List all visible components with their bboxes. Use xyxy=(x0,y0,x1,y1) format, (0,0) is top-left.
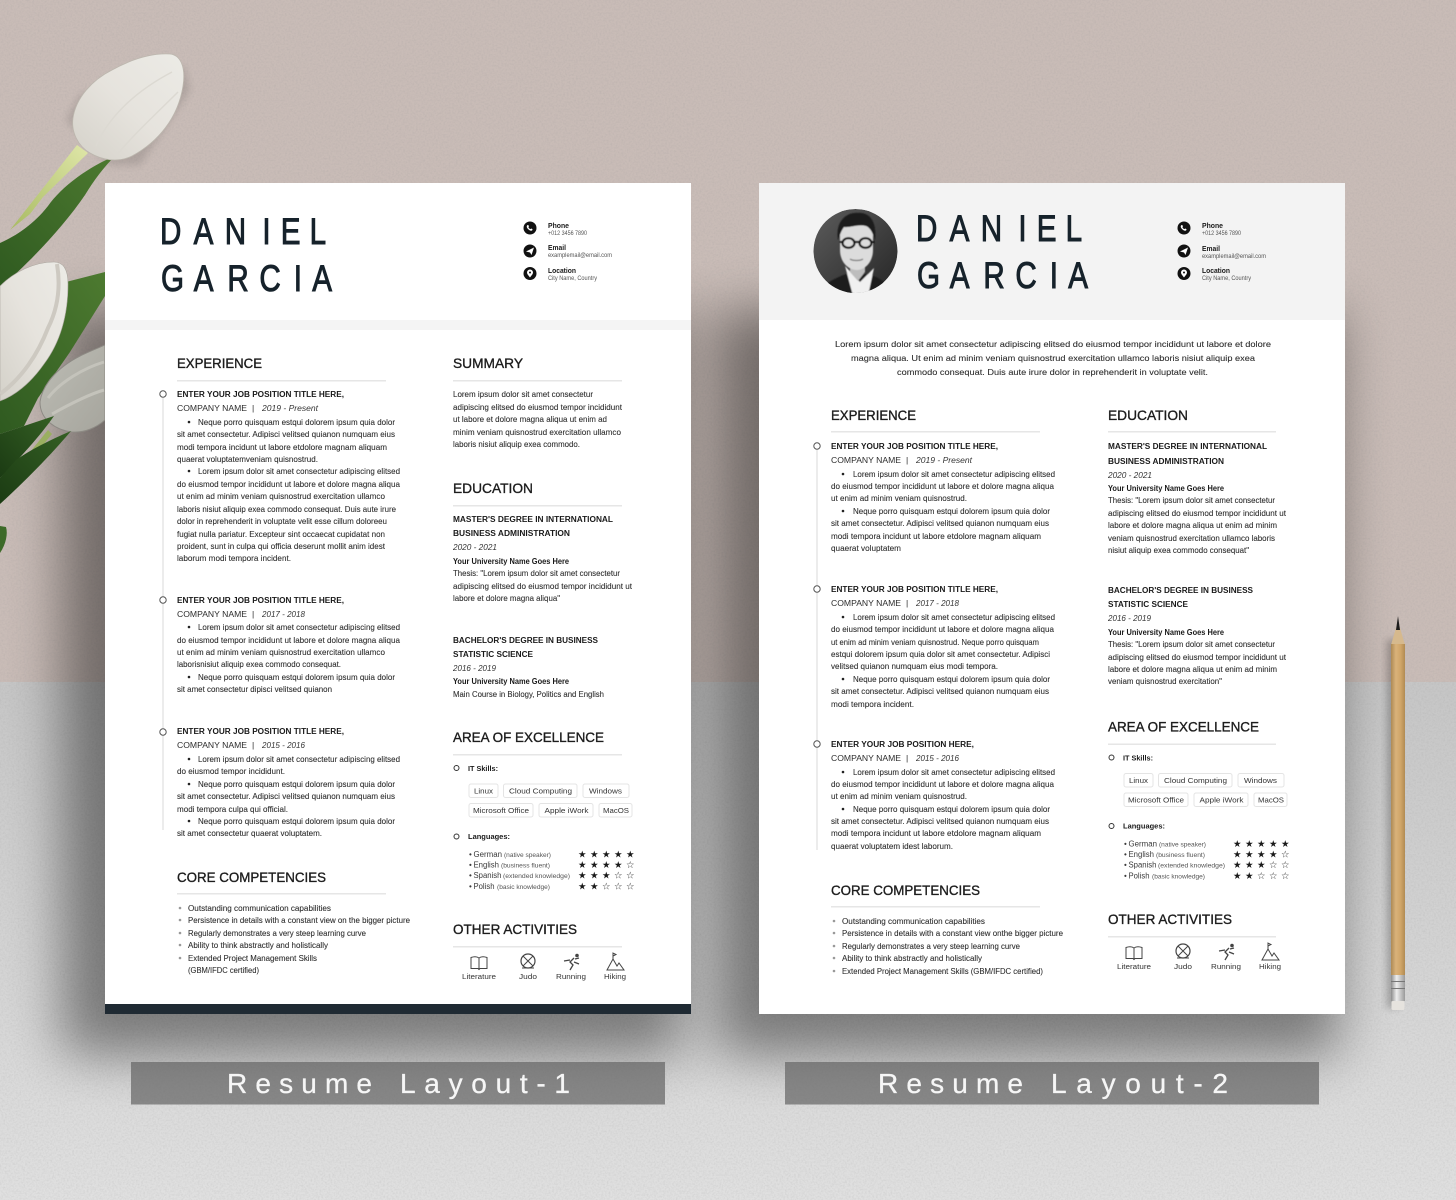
contact block: Location xyxy=(548,266,576,275)
experience section: Neque porro quisquam estqui dolorem ipsum quia dolor xyxy=(853,805,1050,814)
education: BUSINESS ADMINISTRATION xyxy=(453,529,570,538)
area of excellence xyxy=(1108,718,1290,882)
area of excellence: • xyxy=(469,871,472,880)
experience section: Neque porro quisquam estqui dolorem ipsum quia dolor xyxy=(198,673,395,682)
core competencies: Ability to think abstractly and holistically xyxy=(842,954,983,963)
education: 2016 - 2019 xyxy=(452,663,496,673)
contact block: +012 3456 7890 xyxy=(1202,230,1241,237)
other activities xyxy=(1108,911,1281,971)
core competencies xyxy=(177,869,410,975)
area of excellence: German xyxy=(1128,840,1157,848)
area of excellence: Spanish xyxy=(474,871,502,880)
experience section: laborisnisiut aliquip exea commodo consequat. xyxy=(177,660,341,669)
area of excellence: Cloud Computing xyxy=(1164,778,1227,785)
education: nisiut aliquip exea commodo consequat" xyxy=(1108,546,1249,555)
experience section: ENTER YOUR JOB POSITION TITLE HERE, xyxy=(177,596,344,605)
area of excellence: • xyxy=(1124,850,1127,859)
experience section: ENTER YOUR JOB POSITION TITLE HERE, xyxy=(831,442,998,451)
experience section: | xyxy=(906,753,908,763)
core competencies: (GBM/IFDC certified) xyxy=(188,966,259,975)
name: DANIEL xyxy=(916,209,1082,250)
experience section: laboris nisiut aliquip exea commodo consequat. Duis aute irure xyxy=(177,505,396,514)
area of excellence: ★★★☆☆ xyxy=(578,870,635,882)
experience section: Neque porro quisquam estqui dolorem ipsum quia dolor xyxy=(853,507,1050,516)
area of excellence: ★★★★☆ xyxy=(578,860,635,871)
caption: resume layout 2 xyxy=(785,1062,1319,1104)
area of excellence: Apple iWork xyxy=(544,808,589,815)
experience section: Neque porro quisquam estqui dolorem ipsum quia dolor xyxy=(198,780,395,789)
experience section: do eiusmod tempor incididunt ut labore et dolore magna aliqua xyxy=(177,636,400,645)
area of excellence: Apple iWork xyxy=(1200,798,1244,804)
education: Your University Name Goes Here xyxy=(453,677,570,686)
area of excellence: (basic knowledge) xyxy=(1152,874,1205,880)
education: MASTER'S DEGREE IN INTERNATIONAL xyxy=(1108,442,1267,451)
experience section: Lorem ipsum dolor sit amet consectetur adipiscing elitsed xyxy=(853,470,1055,479)
experience section: | xyxy=(252,403,254,413)
education: Your University Name Goes Here xyxy=(1108,628,1225,637)
caption: resume layout 2: Resume xyxy=(878,1068,1023,1099)
name xyxy=(916,209,1089,297)
education: labore et dolore magna aliqua ut enim ad minim xyxy=(1108,665,1277,674)
area of excellence: Microsoft Office xyxy=(473,808,529,815)
contact block xyxy=(1178,221,1266,282)
experience section: ut enim ad minim veniam quisnostrud exercitation ullamco xyxy=(177,492,385,501)
education: EDUCATION xyxy=(453,480,533,496)
name xyxy=(160,212,333,300)
experience section: 2019 - Present xyxy=(261,403,319,413)
tulips decoration xyxy=(0,54,190,553)
experience section: modi tempora culpa qui official. xyxy=(177,805,288,814)
experience section: sit amet consectetur. Adipisci velitsed quianon numquam eius xyxy=(177,430,395,439)
experience section: laborum modi tempora incident. xyxy=(177,554,291,563)
experience section: | xyxy=(252,609,254,619)
education: 2016 - 2019 xyxy=(1107,613,1151,623)
area of excellence: AREA OF EXCELLENCE xyxy=(1108,718,1259,734)
experience section: ENTER YOUR JOB POSITION TITLE HERE, xyxy=(177,390,344,399)
core competencies: CORE COMPETENCIES xyxy=(177,869,326,885)
experience section: COMPANY NAME xyxy=(177,403,247,413)
education: Thesis: "Lorem ipsum dolor sit amet consectetur xyxy=(453,569,620,578)
experience section: Lorem ipsum dolor sit amet consectetur adipiscing elitsed xyxy=(853,768,1055,777)
core competencies: Extended Project Management Skills (GBM/IFDC certified) xyxy=(842,967,1043,976)
area of excellence: (business fluent) xyxy=(501,862,550,870)
contact block: Email xyxy=(1202,244,1220,253)
summary: minim veniam quisnostrud exercitation ullamco xyxy=(453,428,621,437)
area of excellence: Languages: xyxy=(468,832,510,841)
area of excellence: MacOS xyxy=(1258,798,1284,804)
education: Main Course in Biology, Politics and English xyxy=(453,690,604,699)
area of excellence: English xyxy=(474,860,499,870)
name: DANIEL xyxy=(160,212,326,253)
area of excellence: ★★☆☆☆ xyxy=(578,882,635,892)
area of excellence: ★★★☆☆ xyxy=(1233,860,1290,871)
core competencies: Ability to think abstractly and holistically xyxy=(188,941,329,950)
experience section: ENTER YOUR JOB POSITION HERE, xyxy=(831,740,974,749)
other activities: Literature xyxy=(1117,964,1151,971)
experience section xyxy=(831,407,1055,851)
panel: resume layout 1 xyxy=(105,183,691,1014)
area of excellence: IT Skills: xyxy=(1123,754,1153,762)
education: STATISTIC SCIENCE xyxy=(453,650,534,659)
area of excellence: (extended knowledge) xyxy=(1158,862,1225,870)
experience section: COMPANY NAME xyxy=(831,598,901,608)
experience section: Neque porro quisquam estqui dolorem ipsum quia dolor xyxy=(853,675,1050,684)
contact block: Email xyxy=(548,243,566,252)
area of excellence: ★★★★☆ xyxy=(1233,850,1290,860)
experience section: | xyxy=(906,455,908,465)
other activities: Hiking xyxy=(1259,964,1281,971)
contact block: examplemail@email.com xyxy=(548,252,612,259)
education: EDUCATION xyxy=(1108,407,1188,423)
contact block: City Name, Country xyxy=(548,275,598,282)
experience section: proident, sunt in culpa qui officia deserunt mollit anim idest xyxy=(177,542,386,551)
intro paragraph: Lorem ipsum dolor sit amet consectetur adipiscing elitsed do eiusmod tempor incididunt ut labore et dolore xyxy=(835,340,1272,349)
area of excellence: (extended knowledge) xyxy=(503,873,570,880)
area of excellence: Cloud Computing xyxy=(509,788,572,796)
experience section: sit amet consectetur. Adipisci velitsed quianon numquam eius xyxy=(831,519,1049,528)
area of excellence: Windows xyxy=(1244,778,1278,785)
area of excellence: • xyxy=(469,860,472,870)
education: adipiscing elitsed do eiusmod tempor incididunt ut xyxy=(1108,653,1287,662)
other activities: OTHER ACTIVITIES xyxy=(1108,911,1232,927)
name: GARCIA xyxy=(917,256,1089,297)
area of excellence: Languages: xyxy=(1123,822,1165,830)
experience section: do eiusmod tempor incididunt. xyxy=(177,767,285,776)
education: labore et dolore magna aliqua ut enim ad minim xyxy=(1108,521,1277,530)
page shadows xyxy=(62,310,1338,1055)
experience section: ut enim ad minim veniam quisnostrud. Neque porro quisquam xyxy=(831,638,1039,647)
summary: ut labore et dolore magna aliqua ut enim ad xyxy=(453,415,607,424)
core competencies xyxy=(831,882,1063,976)
other activities: Literature xyxy=(462,974,496,981)
area of excellence: ★★☆☆☆ xyxy=(1233,871,1290,882)
other activities: Hiking xyxy=(604,974,626,981)
experience section: quaerat voluptatem xyxy=(831,544,901,553)
education xyxy=(452,480,633,699)
area of excellence: (business fluent) xyxy=(1156,852,1205,859)
panel: resume layout 2 xyxy=(759,183,1345,1014)
other activities: Judo xyxy=(1174,964,1192,971)
area of excellence xyxy=(453,729,635,892)
area of excellence: • xyxy=(469,850,472,859)
experience section: 2015 - 2016 xyxy=(915,753,959,763)
experience section: ENTER YOUR JOB POSITION TITLE HERE, xyxy=(177,727,344,736)
area of excellence: Polish xyxy=(1128,872,1150,880)
experience section: COMPANY NAME xyxy=(177,740,247,750)
core competencies: Extended Project Management Skills xyxy=(188,954,317,963)
experience section: sit amet consectetur. Adipisci velitsed quianon numquam eius xyxy=(831,687,1049,696)
education: Your University Name Goes Here xyxy=(1108,484,1225,493)
education: Your University Name Goes Here xyxy=(453,557,570,566)
experience section: do eiusmod tempor incididunt ut labore et dolore magna aliqua xyxy=(831,780,1054,789)
experience section: sit amet consectetur quaerat voluptatem. xyxy=(177,829,322,838)
area of excellence: Spanish xyxy=(1128,860,1156,870)
caption: resume layout 1: Layout-1 xyxy=(400,1068,570,1099)
area of excellence: • xyxy=(469,882,472,891)
experience section: Lorem ipsum dolor sit amet consectetur adipiscing elitsed xyxy=(198,623,400,632)
summary: laboris nisiut aliquip exea commodo. xyxy=(453,440,580,449)
other activities: Running xyxy=(556,974,586,981)
other activities: Running xyxy=(1211,964,1241,971)
core competencies: Regularly demonstrates a very steep learning curve xyxy=(188,929,366,938)
area of excellence: ★★★★★ xyxy=(578,850,635,860)
area of excellence: • xyxy=(1124,872,1127,880)
other activities xyxy=(453,921,626,981)
contact block: Phone xyxy=(1202,221,1223,230)
contact block: Location xyxy=(1202,266,1230,275)
education: BACHELOR'S DEGREE IN BUSINESS xyxy=(1108,586,1254,595)
area of excellence: (native speaker) xyxy=(504,852,551,859)
core competencies: Persistence in details with a constant view on the bigger picture xyxy=(188,916,410,925)
education xyxy=(1107,407,1287,686)
area of excellence: Windows xyxy=(589,788,623,796)
intro paragraph: commodo consequat. Duis aute irure dolor in reprehenderit in voluptate velit. xyxy=(897,368,1208,377)
education: MASTER'S DEGREE IN INTERNATIONAL xyxy=(453,515,613,524)
education: STATISTIC SCIENCE xyxy=(1108,600,1189,609)
caption: resume layout 1: Resume xyxy=(227,1068,372,1099)
portrait photo xyxy=(814,209,898,296)
experience section: ENTER YOUR JOB POSITION TITLE HERE, xyxy=(831,585,998,594)
experience section: Neque porro quisquam estqui dolorem ipsum quia dolor xyxy=(198,418,395,427)
name: GARCIA xyxy=(161,259,333,300)
education: veniam quisnostrud exercitation ullamco laboris xyxy=(1108,534,1275,543)
experience section: ut enim ad minim veniam quisnostrud. xyxy=(831,494,967,503)
area of excellence: German xyxy=(474,850,502,859)
summary: SUMMARY xyxy=(453,355,524,371)
area of excellence: AREA OF EXCELLENCE xyxy=(453,729,604,745)
contact block: City Name, Country xyxy=(1202,275,1252,282)
core competencies: CORE COMPETENCIES xyxy=(831,882,980,898)
experience section: ut enim ad minim veniam quisnostrud exercitation ullamco xyxy=(177,648,385,657)
intro paragraph: magna aliqua. Ut enim ad minim veniam quisnostrud exercitation ullamco laboris nisiut aliquip exea xyxy=(851,354,1256,363)
core competencies: Outstanding communication capabilities xyxy=(842,917,985,926)
contact block: +012 3456 7890 xyxy=(548,230,587,237)
experience section: sit amet consectetur. Adipisci velitsed quianon numquam eius xyxy=(831,817,1049,826)
education: Thesis: "Lorem ipsum dolor sit amet consectetur xyxy=(1108,640,1275,649)
area of excellence: English xyxy=(1128,850,1154,859)
experience section: sit amet consectetur. Adipisci velitsed quianon numquam eius xyxy=(177,792,395,801)
experience section: modi tempora incidunt ut labore etdolore magnam aliquam xyxy=(831,829,1041,838)
area of excellence: ★★★★★ xyxy=(1233,839,1290,850)
experience section: 2015 - 2016 xyxy=(261,740,305,750)
experience section: modi tempora incident. xyxy=(831,700,914,709)
summary xyxy=(453,355,623,449)
experience section: quaerat voluptatemveniam quisnostrud. xyxy=(177,455,318,464)
footer bar xyxy=(105,1004,691,1014)
area of excellence: Linux xyxy=(1129,778,1149,785)
core competencies: Persistence in details with a constant view onthe bigger picture xyxy=(842,929,1063,938)
experience section: COMPANY NAME xyxy=(831,753,901,763)
experience section: | xyxy=(906,598,908,608)
experience section: COMPANY NAME xyxy=(831,455,901,465)
experience section: sit amet consectetur dipisci velitsed quianon xyxy=(177,685,332,694)
experience section: quaerat voluptatem idest laborum. xyxy=(831,842,953,851)
education: labore et dolore magna aliqua" xyxy=(453,594,560,603)
education: adipiscing elitsed do eiusmod tempor incididunt ut xyxy=(453,582,633,591)
experience section: EXPERIENCE xyxy=(831,407,916,423)
experience section: Lorem ipsum dolor sit amet consectetur adipiscing elitsed xyxy=(198,467,400,476)
contact block: Phone xyxy=(548,221,569,230)
area of excellence: (native speaker) xyxy=(1159,842,1206,848)
experience section: Neque porro quisquam estqui dolorem ipsum quia dolor xyxy=(198,817,395,826)
experience section: fugiat nulla pariatur. Excepteur sint occaecat cupidatat non xyxy=(177,530,385,539)
education: 2020 - 2021 xyxy=(1107,470,1152,480)
other activities: Judo xyxy=(519,974,537,981)
core competencies: Regularly demonstrates a very steep learning curve xyxy=(842,942,1020,951)
caption: resume layout 2: Layout-2 xyxy=(1051,1068,1228,1099)
education: adipiscing elitsed do eiusmod tempor incididunt ut xyxy=(1108,509,1287,518)
summary: Lorem ipsum dolor sit amet consectetur xyxy=(453,390,593,399)
education: veniam quisnostrud exercitation" xyxy=(1108,677,1222,686)
core competencies: Outstanding communication capabilities xyxy=(188,904,331,913)
area of excellence: MacOS xyxy=(603,808,629,815)
caption: resume layout 1 xyxy=(131,1062,665,1104)
education: BACHELOR'S DEGREE IN BUSINESS xyxy=(453,636,599,645)
experience section: ut enim ad minim veniam quisnostrud. xyxy=(831,792,967,801)
experience section: do eiusmod tempor incididunt ut labore et dolore magna aliqua xyxy=(831,625,1054,634)
area of excellence: Polish xyxy=(474,882,494,891)
experience section: 2017 - 2018 xyxy=(261,609,305,619)
area of excellence: IT Skills: xyxy=(468,764,498,773)
area of excellence: • xyxy=(1124,860,1127,870)
area of excellence: Microsoft Office xyxy=(1128,798,1184,804)
area of excellence: Linux xyxy=(474,788,494,796)
experience section: modi tempora incidunt ut labore etdolore magnam aliquam xyxy=(177,443,387,452)
timeline xyxy=(814,443,820,850)
area of excellence: (basic knowledge) xyxy=(497,884,550,891)
education: BUSINESS ADMINISTRATION xyxy=(1108,457,1224,466)
experience section xyxy=(177,355,400,838)
experience section: dolor in reprehenderit in voluptate velit esse cillum doloreeu xyxy=(177,517,387,526)
experience section: EXPERIENCE xyxy=(177,355,262,371)
experience section: 2019 - Present xyxy=(915,455,973,465)
area of excellence: • xyxy=(1124,840,1127,848)
timeline xyxy=(160,391,166,830)
experience section: 2017 - 2018 xyxy=(915,598,959,608)
experience section: modi tempora incidunt ut labore etdolore magnam aliquam xyxy=(831,532,1041,541)
education: 2020 - 2021 xyxy=(452,542,497,552)
experience section: do eiusmod tempor incididunt ut labore et dolore magna aliqua xyxy=(177,480,400,489)
experience section: estqui dolorem ipsum quia dolor sit amet consectetur. Adipisci xyxy=(831,650,1050,659)
experience section: velitsed quianon numquam eius modi tempora. xyxy=(831,662,998,671)
experience section: Lorem ipsum dolor sit amet consectetur adipiscing elitsed xyxy=(198,755,400,764)
education: Thesis: "Lorem ipsum dolor sit amet consectetur xyxy=(1108,496,1275,505)
contact block xyxy=(524,221,612,282)
summary: adipiscing elitsed do eiusmod tempor incididunt xyxy=(453,403,623,412)
intro paragraph xyxy=(835,340,1272,377)
experience section: | xyxy=(252,740,254,750)
other activities: OTHER ACTIVITIES xyxy=(453,921,577,937)
experience section: COMPANY NAME xyxy=(177,609,247,619)
contact block: examplemail@email.com xyxy=(1202,253,1266,260)
pencil xyxy=(1387,616,1405,1010)
experience section: Lorem ipsum dolor sit amet consectetur adipiscing elitsed xyxy=(853,613,1055,622)
experience section: do eiusmod tempor incididunt ut labore et dolore magna aliqua xyxy=(831,482,1054,491)
